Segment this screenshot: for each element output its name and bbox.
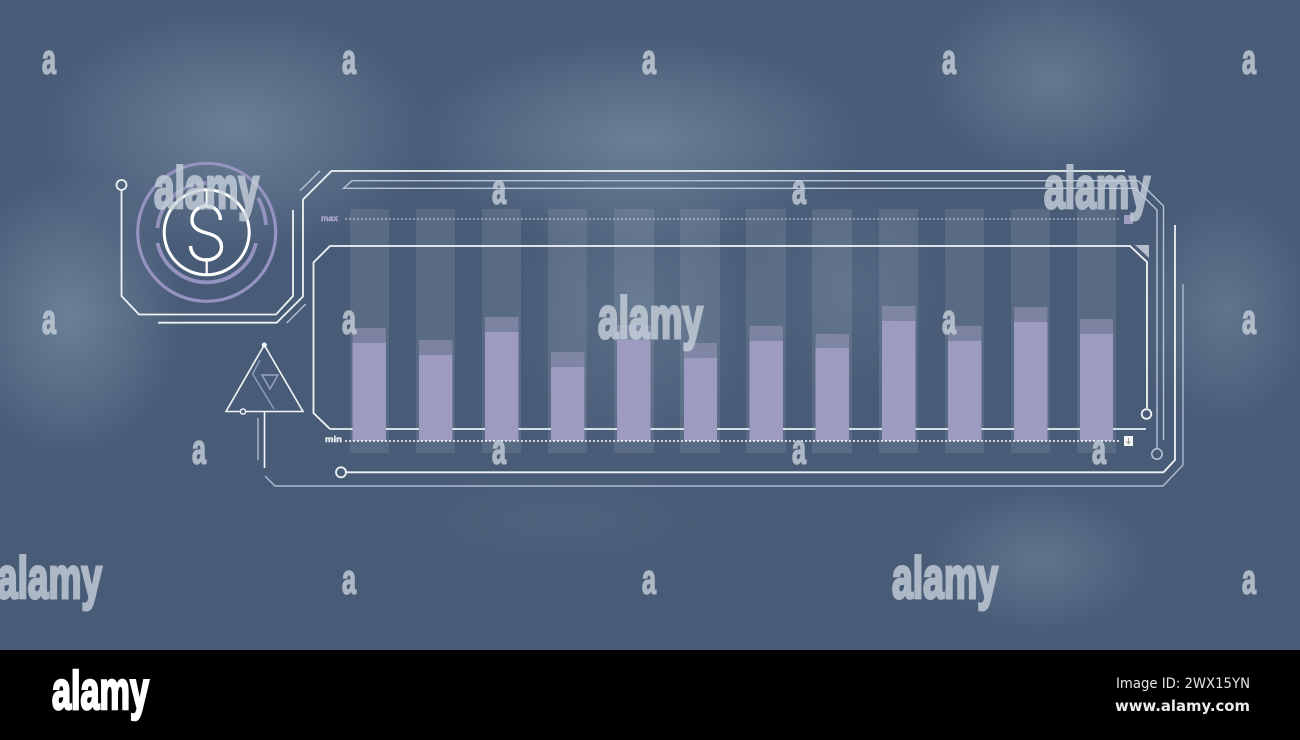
small watermarks	[42, 36, 1256, 602]
frame corner marker	[1135, 245, 1149, 258]
double rail top right	[344, 181, 1164, 448]
large watermarks: alamy	[1044, 156, 1150, 221]
bar 8	[812, 209, 852, 453]
small watermarks: a	[642, 36, 656, 82]
small watermarks: a	[792, 166, 806, 212]
inner frame bottom line	[330, 428, 1146, 430]
bar 1	[350, 209, 389, 453]
small watermarks: a	[192, 426, 206, 472]
double rail end node	[1152, 449, 1162, 459]
inner frame	[314, 246, 1147, 429]
triangle icon	[226, 342, 303, 468]
bar 2	[416, 209, 455, 453]
small watermarks: a	[342, 296, 356, 342]
small watermarks: a	[1242, 36, 1256, 82]
small watermarks: a	[1092, 426, 1106, 472]
coin outer ring	[138, 163, 276, 301]
large watermarks: alamy	[598, 286, 703, 351]
bottom rail end node	[336, 467, 346, 477]
max label and dotted line	[321, 213, 1133, 224]
chart panel	[158, 171, 1183, 486]
bar 9	[879, 209, 918, 453]
footer logo: alamy	[52, 661, 149, 721]
coin middle arcs	[158, 183, 266, 282]
small watermarks: a	[492, 166, 506, 212]
bar 12	[1077, 209, 1116, 453]
small watermarks: a	[492, 426, 506, 472]
outer light rail	[265, 284, 1183, 486]
bar chart	[350, 209, 1116, 453]
large watermarks: alamy	[0, 546, 102, 611]
bar 6	[680, 209, 720, 453]
outer frame top	[158, 171, 1125, 323]
footer bar	[0, 650, 1300, 740]
small watermarks: a	[792, 426, 806, 472]
small watermarks: a	[42, 36, 56, 82]
large watermarks: alamy	[154, 156, 259, 221]
small watermarks: a	[1242, 296, 1256, 342]
small watermarks: a	[342, 556, 356, 602]
small watermarks: a	[642, 556, 656, 602]
bar 5	[614, 209, 654, 453]
min label and dotted line	[325, 434, 1133, 446]
coin inner ring and ticks	[206, 190, 208, 275]
dollar coin icon	[138, 163, 276, 301]
bar 10	[945, 209, 984, 453]
small watermarks: a	[42, 296, 56, 342]
image id: Image ID: 2WX15YN	[1116, 676, 1250, 692]
bar 11	[1011, 209, 1050, 453]
max label and dotted line: max	[321, 213, 338, 223]
dollar S glyph	[190, 206, 222, 260]
website: www.alamy.com	[1115, 697, 1250, 715]
bar 7	[746, 209, 786, 453]
bottom right rail	[346, 225, 1175, 472]
small watermarks: a	[1242, 556, 1256, 602]
accent slashes	[287, 171, 320, 323]
large watermarks	[0, 156, 1150, 611]
min label and dotted line: min	[325, 434, 342, 444]
bar 4	[548, 209, 587, 453]
small watermarks: a	[942, 296, 956, 342]
small watermarks: a	[942, 36, 956, 82]
inner frame end node	[1142, 409, 1151, 419]
small watermarks: a	[342, 36, 356, 82]
coin frame connector	[116, 180, 293, 314]
large watermarks: alamy	[892, 546, 998, 611]
bar 3	[482, 209, 521, 453]
